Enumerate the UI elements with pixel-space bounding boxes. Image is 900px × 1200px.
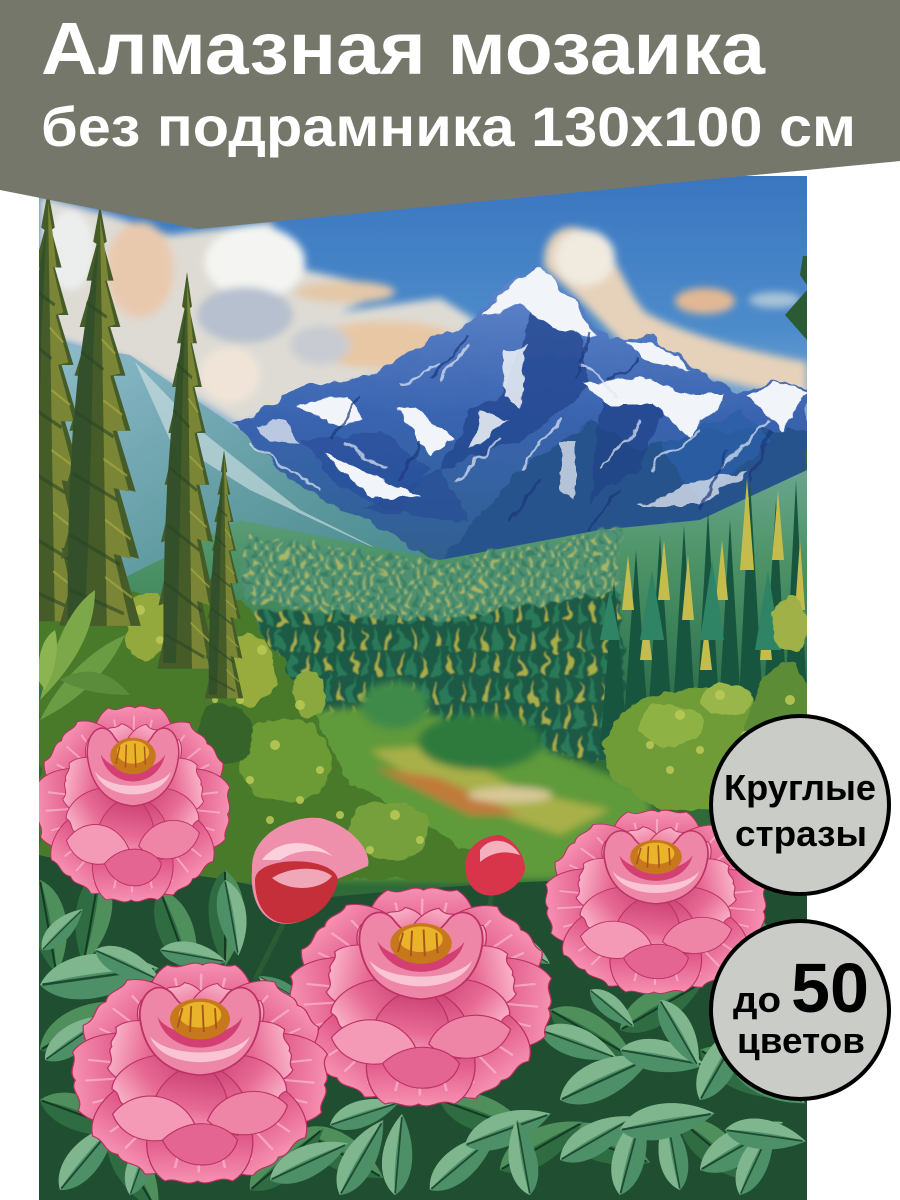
sky — [39, 176, 807, 436]
badge: round rhinestones — [711, 716, 889, 894]
tall fir trees, left — [39, 199, 244, 698]
peony: right — [542, 810, 770, 997]
forest trees: right side — [600, 480, 810, 760]
badge: round rhinestones: Круглые — [724, 767, 876, 808]
far forest band — [245, 528, 620, 630]
ridge strokes — [250, 345, 770, 490]
mountain shadow ridges — [440, 312, 589, 469]
foliage leaves: light layer — [34, 877, 813, 1200]
forest valley — [39, 470, 807, 760]
clouds: right — [544, 227, 807, 400]
bush texture — [135, 605, 795, 854]
painting: mountain landscape with peonies — [7, 176, 825, 1200]
bushes: right — [602, 595, 807, 812]
title line 2: без подрамника 130х100 см — [41, 95, 856, 158]
peony: centre — [286, 888, 556, 1110]
leaf at right edge — [785, 256, 807, 340]
badge: up to 50 colours — [711, 921, 889, 1099]
badge: round rhinestones: стразы — [735, 813, 867, 854]
badge: up to 50 colours: 50 — [791, 949, 869, 1027]
forest mid band — [255, 590, 625, 760]
mountain massif — [232, 270, 807, 562]
badge: up to 50 colours: до — [733, 979, 781, 1020]
foliage leaves: dark layer — [24, 867, 794, 1200]
bushes: left — [39, 590, 500, 880]
title line 1: Алмазная мозаика — [41, 7, 766, 90]
peony: upper left — [33, 706, 233, 905]
foliage ground — [39, 855, 807, 1200]
badge: up to 50 colours: цветов — [737, 1020, 865, 1061]
header banner — [0, 0, 900, 229]
peony: lower left — [68, 963, 332, 1187]
peony bud: centre left — [252, 818, 368, 924]
back slope, left — [62, 344, 430, 576]
peony bud: small centre — [465, 835, 525, 896]
clouds: left — [39, 195, 475, 425]
snow patches — [255, 270, 805, 505]
leaves by left edge — [38, 590, 130, 720]
stems — [255, 892, 492, 980]
meadow — [230, 681, 650, 880]
